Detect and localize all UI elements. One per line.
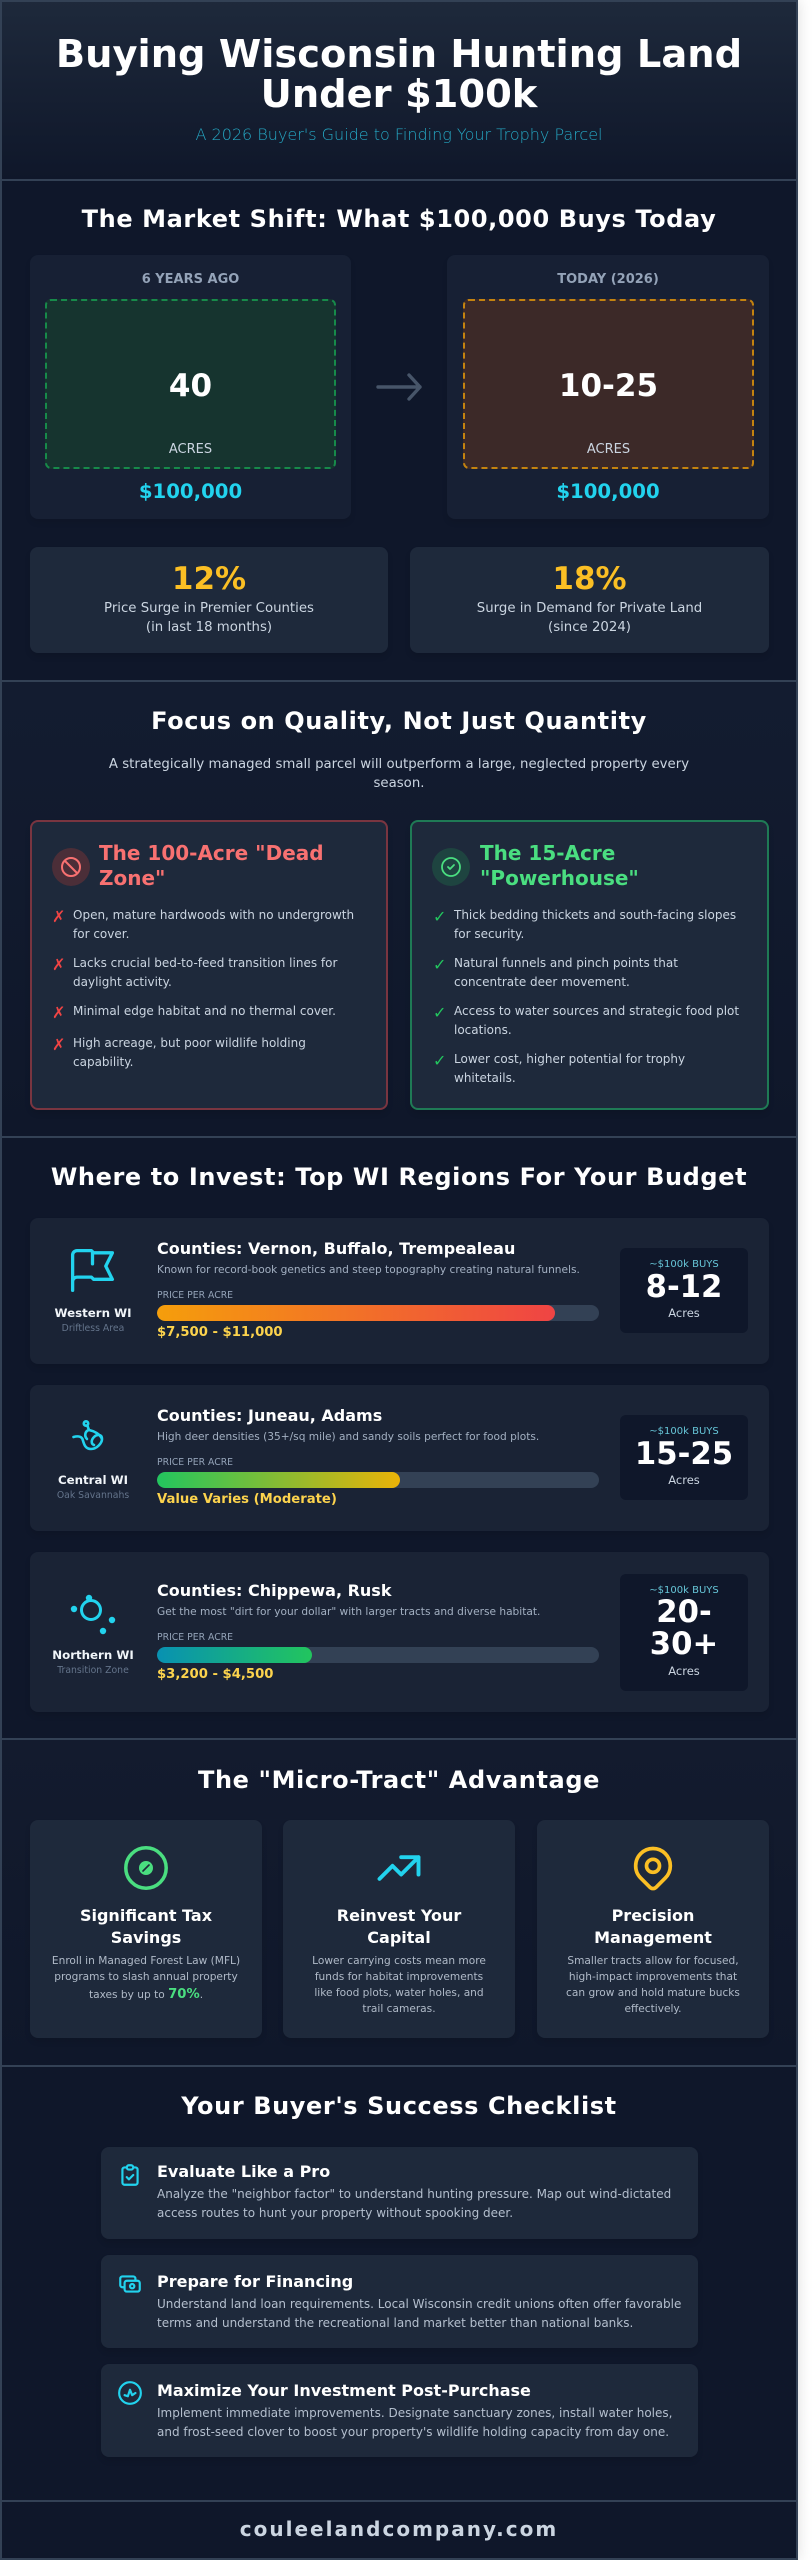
text (454, 956, 678, 989)
panel title: The 15-Acre (480, 841, 615, 865)
heading: micro-tract: The "Micro-Tract" Advantage (198, 1766, 600, 1794)
item title: Prepare for Financing (157, 2272, 353, 2291)
text: Lower cost, higher potential for trophy (454, 1052, 685, 1066)
region name: Northern WI (52, 1648, 134, 1662)
card text: Lower carrying costs mean more (312, 1955, 486, 1967)
card text (312, 1955, 486, 2015)
counties: Counties: Chippewa, Rusk (157, 1581, 391, 1600)
description: High deer densities (35+/sq mile) and sandy soils perfect for food plots. (157, 1431, 539, 1443)
cross: ✗ (52, 1035, 65, 1054)
price bar (157, 1472, 599, 1488)
title: Buying Wisconsin Hunting Land (56, 32, 742, 77)
item text (157, 2404, 672, 2441)
list item (52, 907, 354, 941)
acreage box (620, 1415, 748, 1500)
price: $100,000: $100,000 (556, 480, 660, 503)
unit: acres: ACRES (587, 442, 630, 457)
card text: taxes by up to 70%. (89, 1987, 203, 2002)
stat: 12% (30, 547, 388, 653)
check: ✓ (433, 907, 446, 926)
icon: clipboard (121, 2164, 139, 2186)
list item (433, 955, 678, 989)
panel: western WI (30, 1218, 769, 1364)
intro text: season. (374, 776, 424, 791)
list item (433, 1003, 739, 1037)
card text (566, 1955, 740, 2015)
heading: regions: Where to Invest: Top WI Regions For Your Budget (51, 1163, 747, 1191)
description: Surge in Demand for Private Land (477, 601, 702, 616)
description: Price Surge in Premier Counties (104, 601, 314, 616)
title: Under $100k (261, 72, 537, 117)
unit: acres: ACRES (169, 442, 212, 457)
card text: funds for habitat improvements (315, 1971, 483, 1983)
item text: and frost-seed clover to boost your property's wildlife holding capacity from day one. (157, 2425, 669, 2439)
card text: trail cameras. (362, 2003, 436, 2015)
check: ✓ (433, 1051, 446, 1070)
parcel box: 10-25 acres (463, 299, 754, 469)
card text: can grow and hold mature bucks (566, 1987, 740, 1999)
card text: Enroll in Managed Forest Law (MFL) (52, 1955, 240, 1967)
acreage: 30+ (650, 1627, 718, 1662)
text (73, 1036, 306, 1069)
text (454, 1052, 685, 1085)
check: ✓ (433, 955, 446, 974)
icon: deer (72, 1420, 104, 1450)
panel: 6 years ago (30, 255, 351, 519)
label: ~$100k BUYS (649, 1259, 719, 1270)
text: Natural funnels and pinch points that (454, 956, 678, 970)
item: evaluate (101, 2147, 698, 2239)
title (56, 32, 742, 117)
acreage: 15-25 (635, 1437, 733, 1472)
acreage box (620, 1248, 748, 1333)
item title: Maximize Your Investment Post-Purchase (157, 2381, 531, 2400)
item: financing (101, 2255, 698, 2348)
panel: reinvest (283, 1820, 515, 2038)
icon: map pin (634, 1846, 672, 1890)
parcel box: 40 acres (45, 299, 336, 469)
panel: today (447, 255, 769, 519)
number: 10-25: 10-25 (559, 368, 658, 404)
description: (in last 18 months) (146, 620, 272, 635)
cross: ✗ (52, 907, 65, 926)
unit: Acres (668, 1473, 700, 1487)
bar label: PRICE PER ACRE (157, 1632, 233, 1643)
description: (since 2024) (548, 620, 631, 635)
card title (337, 1906, 462, 1946)
text: Open, mature hardwoods with no undergrowth (73, 908, 354, 922)
card title: Savings (111, 1928, 181, 1946)
list item (52, 1003, 336, 1022)
region subtitle: Transition Zone (57, 1665, 129, 1676)
card text: effectively. (624, 2003, 682, 2015)
label: today 2026: TODAY (2026) (557, 272, 659, 287)
region subtitle: Oak Savannahs (57, 1490, 129, 1501)
text: for security. (454, 927, 524, 941)
card text: programs to slash annual property (54, 1971, 238, 1983)
text: for cover. (73, 927, 129, 941)
unit: Acres (668, 1306, 700, 1320)
label: 6 years ago: 6 YEARS AGO (142, 272, 239, 287)
description: Get the most "dirt for your dollar" with larger tracts and diverse habitat. (157, 1606, 540, 1618)
acreage: 8-12 (646, 1270, 722, 1305)
panel title (480, 841, 639, 890)
card title: Precision (612, 1906, 694, 1925)
text (73, 908, 354, 941)
arrow (376, 373, 422, 401)
text: locations. (454, 1023, 512, 1037)
website: couleelandcompany.com (240, 2517, 558, 2541)
panel: northern WI (30, 1552, 769, 1712)
section: market shift (0, 181, 798, 682)
section: header (0, 0, 798, 181)
item text: access routes to hunt your property without spooking deer. (157, 2206, 513, 2220)
panel: dead zone (30, 820, 388, 1110)
stat: 18% (410, 547, 769, 653)
value: 18%: 18% (552, 561, 627, 597)
description: Known for record-book genetics and steep topography creating natural funnels. (157, 1264, 580, 1276)
counties: Counties: Vernon, Buffalo, Trempealeau (157, 1239, 515, 1258)
icon: ban (52, 848, 90, 886)
label: ~$100k BUYS (649, 1426, 719, 1437)
text: capability. (73, 1055, 133, 1069)
icon: flag (70, 1249, 114, 1292)
heading: market shift: The Market Shift: What $100,000 Buys Today (82, 205, 716, 233)
number: 40: 40 (169, 368, 212, 404)
cross: ✗ (52, 1003, 65, 1022)
panel title (99, 841, 324, 890)
item title: Evaluate Like a Pro (157, 2162, 330, 2181)
text: High acreage, but poor wildlife holding (73, 1036, 306, 1050)
subtitle: A 2026 Buyer's Guide to Finding Your Trophy Parcel (195, 125, 602, 144)
icon: pulse circle (118, 2381, 142, 2405)
region name: Western WI (54, 1306, 131, 1320)
section: micro-tract advantage (0, 1740, 798, 2067)
heading: quality: Focus on Quality, Not Just Quantity (151, 707, 647, 735)
value: 12%: 12% (172, 561, 246, 597)
text: Thick bedding thickets and south-facing slopes (454, 908, 736, 922)
price: $100,000: $100,000 (139, 480, 242, 503)
item text (157, 2187, 671, 2220)
panel: powerhouse (410, 820, 769, 1110)
list item (52, 955, 338, 989)
item text: terms and understand the recreational land market better than national banks. (157, 2316, 633, 2330)
list item (52, 1035, 306, 1069)
icon: check circle (432, 848, 470, 886)
card title: Capital (367, 1928, 431, 1946)
section: regions (0, 1138, 798, 1740)
footer (0, 2502, 798, 2560)
list item (433, 907, 736, 941)
card title (80, 1906, 212, 1946)
list item (433, 1051, 685, 1085)
item text (157, 2297, 681, 2330)
region subtitle: Driftless Area (62, 1323, 124, 1334)
description (104, 601, 314, 635)
price range: Value Varies (Moderate) (157, 1492, 337, 1507)
check: ✓ (433, 1003, 446, 1022)
icon: tax target (124, 1846, 168, 1890)
card text (52, 1955, 240, 2002)
item text: Analyze the "neighbor factor" to understand hunting pressure. Map out wind-dictated (157, 2187, 671, 2201)
intro text (109, 757, 689, 791)
text: Access to water sources and strategic food plot (454, 1004, 739, 1018)
text: daylight activity. (73, 975, 172, 989)
item text: Understand land loan requirements. Local Wisconsin credit unions often offer favorable (157, 2297, 681, 2311)
counties: Counties: Juneau, Adams (157, 1406, 382, 1425)
text (73, 956, 338, 989)
card title: Significant Tax (80, 1906, 212, 1925)
description (477, 601, 702, 635)
item text: Implement immediate improvements. Designate sanctuary zones, install water holes, (157, 2406, 672, 2420)
icon: circle and dots (70, 1594, 116, 1634)
intro text: A strategically managed small parcel will outperform a large, neglected property every (109, 757, 689, 772)
price range: $7,500 - $11,000 (157, 1325, 283, 1340)
icon: trending up (377, 1855, 421, 1881)
panel title: The 100-Acre "Dead (99, 841, 324, 865)
card text: high-impact improvements that (569, 1971, 737, 1983)
panel title: "Powerhouse" (480, 866, 639, 890)
card title: Management (594, 1928, 712, 1946)
card title: Reinvest Your (337, 1906, 461, 1925)
card text: like food plots, water holes, and (314, 1987, 484, 1999)
text: Minimal edge habitat and no thermal cover. (73, 1004, 336, 1018)
price range: $3,200 - $4,500 (157, 1667, 273, 1682)
card title (594, 1906, 712, 1946)
text: whitetails. (454, 1071, 516, 1085)
bar label: PRICE PER ACRE (157, 1457, 233, 1468)
item: maximize (101, 2364, 698, 2457)
bar label: PRICE PER ACRE (157, 1290, 233, 1301)
price bar (157, 1647, 599, 1663)
panel: tax savings (30, 1820, 262, 2038)
label: ~$100k BUYS (649, 1585, 719, 1596)
section: quality (0, 682, 798, 1138)
acreage (650, 1595, 718, 1662)
region name: Central WI (58, 1473, 128, 1487)
cross: ✗ (52, 955, 65, 974)
panel: precision management (537, 1820, 769, 2038)
panel title: Zone" (99, 866, 165, 890)
acreage: 20- (656, 1595, 712, 1630)
unit: Acres (668, 1664, 700, 1678)
section: checklist (0, 2067, 798, 2502)
icon: cash (119, 2275, 141, 2293)
text (454, 1004, 739, 1037)
text (454, 908, 736, 941)
price bar (157, 1305, 599, 1321)
text: Lacks crucial bed-to-feed transition lines for (73, 956, 337, 970)
card text: Smaller tracts allow for focused, (567, 1955, 739, 1967)
panel: central WI (30, 1385, 769, 1531)
acreage box (620, 1574, 748, 1691)
text: concentrate deer movement. (454, 975, 630, 989)
heading: checklist: Your Buyer's Success Checklist (181, 2092, 617, 2120)
